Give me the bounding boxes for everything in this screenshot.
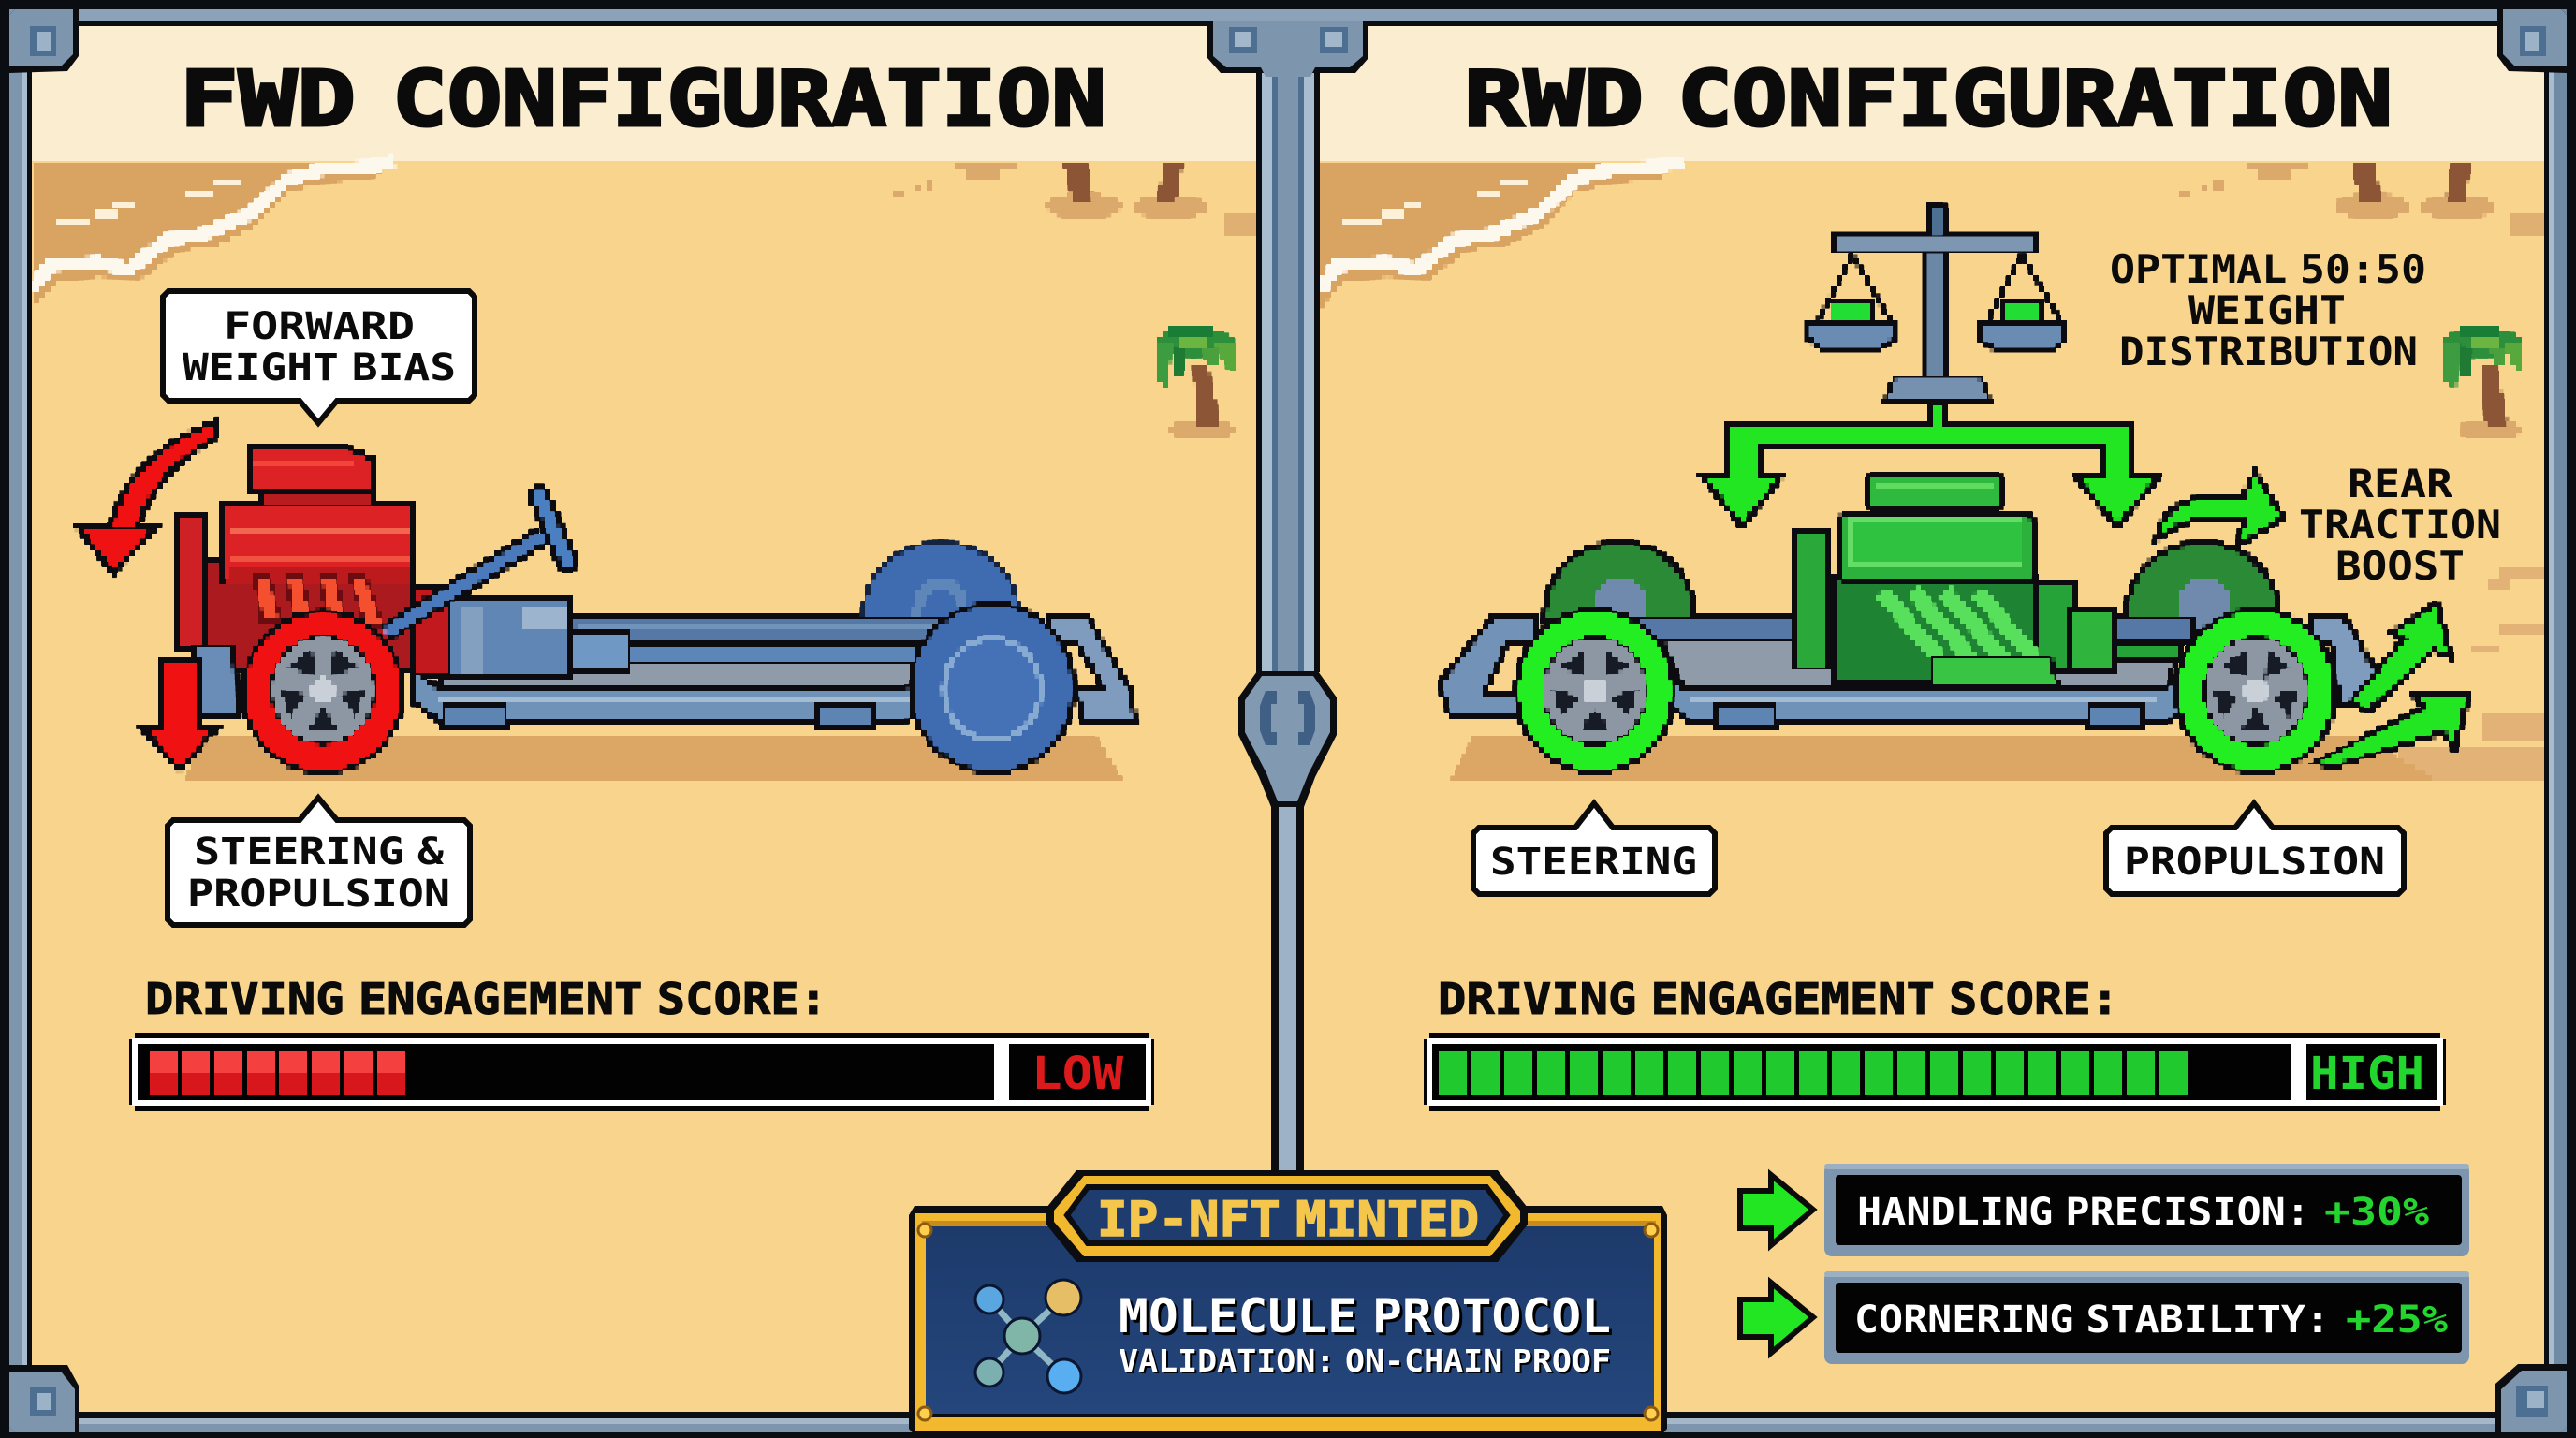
badge text: molecule protocol: VALIDATION: ON-CHAIN PROOF (1120, 1344, 1613, 1381)
callout: steering and propulsion: PROPULSION (187, 873, 450, 916)
far front wheel (1544, 543, 1694, 620)
title: RWD CONFIGURATION: CONFIGURATION (1677, 55, 2393, 144)
label: rear traction boost: TRACTION (2299, 502, 2501, 548)
manifold tubes (1881, 592, 2035, 659)
beach scenery: left (32, 161, 1256, 440)
rear driven wheel (2176, 609, 2335, 772)
label: rear traction boost (2299, 461, 2501, 589)
front steering wheel (1516, 609, 1674, 772)
score bar: FWD low (129, 1033, 1154, 1111)
callout: propulsion: PROPULSION (2124, 841, 2385, 884)
arrow: rear traction curve (2157, 473, 2283, 545)
label: rear traction boost: REAR (2348, 461, 2453, 506)
score label: FWD: DRIVING ENGAGEMENT SCORE: (145, 974, 827, 1024)
badge text: molecule protocol (1119, 1289, 1614, 1381)
callout: forward weight bias: FORWARD (224, 305, 415, 348)
gold corner studs (918, 1224, 1658, 1420)
IP-NFT badge plate (909, 1170, 1667, 1436)
arrow: thrust upper (2351, 603, 2451, 712)
rear bumper (1050, 618, 1134, 721)
ground shadow (187, 735, 1121, 779)
label: rear traction boost: BOOST (2335, 543, 2465, 589)
score label: RWD: DRIVING ENGAGEMENT SCORE: (1438, 974, 2119, 1024)
heading band: FWD (32, 26, 1256, 161)
badge text: molecule protocol: MOLECULE PROTOCOL (1119, 1289, 1611, 1343)
arrow: thrust lower (2315, 693, 2469, 768)
stat: cornering stability: CORNERING STABILITY: (1854, 1299, 2330, 1342)
badge text: molecule protocol: VALIDATION: ON-CHAIN PROOF (1119, 1343, 1611, 1379)
sand texture: right edge (2396, 567, 2544, 779)
title: FWD CONFIGURATION: CONFIGURATION (392, 55, 1106, 144)
front bumper (193, 646, 238, 717)
icon: molecule (975, 1280, 1081, 1393)
manifold fingers (255, 577, 384, 625)
ground shadow (1452, 735, 2434, 779)
callout: steering and propulsion: STEERING & (194, 830, 445, 873)
stat: handling precision (1740, 1164, 2469, 1256)
label: optimal weight distribution: DISTRIBUTION (2119, 329, 2418, 374)
label: optimal weight distribution: OPTIMAL 50:50 (2110, 246, 2426, 292)
balance scale icon (1808, 204, 2065, 403)
panel: right RWD background (1288, 26, 2545, 1412)
callout: steering and propulsion (168, 798, 470, 925)
bumpers (1440, 618, 1535, 717)
chassis (1633, 618, 2195, 728)
callout: steering: STEERING (1490, 841, 1697, 884)
steering wheel (539, 496, 567, 562)
title: FWD CONFIGURATION (180, 55, 1106, 144)
title: RWD CONFIGURATION (1464, 55, 2393, 144)
panel: left FWD background (32, 26, 1288, 1412)
score bar: RWD high (1424, 1033, 2446, 1111)
engine (179, 447, 449, 674)
stat: cornering stability (1740, 1271, 2469, 1364)
callout: steering (1473, 803, 1715, 894)
segments (150, 1051, 405, 1095)
label: optimal weight distribution (2110, 246, 2426, 374)
stat: handling precision: +30% (2324, 1191, 2429, 1234)
title: FWD CONFIGURATION: FWD (180, 55, 356, 144)
central divider column (1208, 21, 1368, 1172)
FWD car illustration (79, 421, 1134, 779)
beach scenery: right (1320, 161, 2544, 440)
callout: forward weight bias: WEIGHT BIAS (183, 346, 456, 389)
heading band: RWD (1320, 26, 2545, 161)
label: optimal weight distribution: WEIGHT (2188, 287, 2346, 333)
stat: handling precision: HANDLING PRECISION: (1857, 1191, 2310, 1234)
chassis rails (411, 618, 945, 728)
arrow: down force (141, 662, 218, 770)
badge banner (1046, 1170, 1528, 1262)
arrow icon (1740, 1283, 1813, 1353)
callout: propulsion (2106, 803, 2404, 894)
badge text: molecule protocol: MOLECULE PROTOCOL (1121, 1292, 1614, 1346)
far rear wheel (2126, 543, 2279, 620)
steering column (386, 536, 543, 633)
stat: cornering stability: +25% (2346, 1299, 2448, 1342)
divider lower stem (1271, 786, 1304, 1172)
divider knob (1238, 671, 1337, 807)
rear wheel (911, 604, 1074, 772)
callout: forward weight bias (163, 291, 475, 423)
transmission (447, 599, 629, 678)
far rear wheel (863, 543, 1018, 618)
RWD car illustration (1440, 404, 2469, 779)
segments (1439, 1051, 2188, 1095)
arrow: curved forward weight (110, 421, 217, 530)
collector (1932, 657, 2057, 685)
green engine (1794, 473, 2179, 683)
score bar: FWD low: LOW (1032, 1048, 1123, 1100)
badge banner: IP-NFT MINTED (1097, 1192, 1479, 1248)
title: RWD CONFIGURATION: RWD (1464, 55, 1644, 144)
arrow: balanced load bracket (1704, 404, 2158, 526)
front driven wheel (243, 611, 402, 772)
score bar: RWD high: HIGH (2310, 1048, 2424, 1100)
arrow icon (1740, 1175, 1813, 1245)
divider top flange (1208, 21, 1368, 77)
